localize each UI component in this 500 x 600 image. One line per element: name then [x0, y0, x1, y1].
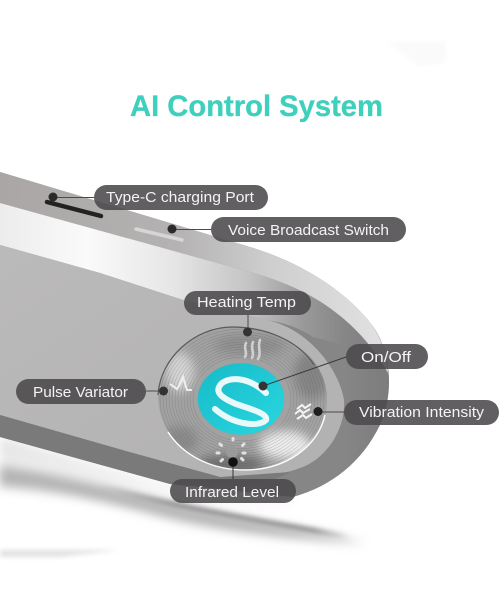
callout: vibration intensity — [314, 400, 499, 425]
top rim strip — [0, 172, 388, 373]
callout: type-c port: Type-C charging Port — [106, 189, 255, 206]
callout: voice switch — [168, 217, 406, 242]
callout: heating temp — [184, 291, 311, 336]
concentric rings — [160, 329, 324, 469]
voice switch — [136, 229, 182, 240]
dial lighting — [162, 335, 330, 475]
dial rim shadow — [158, 327, 314, 395]
callout: infrared level: Infrared Level — [185, 484, 279, 501]
icon: vibration — [295, 404, 312, 419]
callout: infrared level — [170, 457, 296, 503]
control dial — [158, 327, 330, 475]
infographic canvas — [0, 94, 499, 558]
icon: infrared sun — [217, 438, 245, 461]
S logo — [215, 379, 266, 424]
outer shell — [0, 172, 389, 497]
icon: pulse wave — [170, 377, 192, 390]
callout: on/off — [258, 344, 428, 390]
neck device body — [0, 172, 389, 497]
callout: vibration intensity: Vibration Intensity — [359, 404, 485, 421]
callout: type-c port — [48, 185, 268, 210]
callout: heating temp: Heating Temp — [197, 294, 296, 311]
floor shadow — [0, 437, 365, 557]
callout: pulse variator: Pulse Variator — [33, 384, 128, 401]
icon: heat waves — [245, 340, 260, 359]
white highlight band — [0, 203, 345, 345]
dial rim highlight — [168, 415, 325, 470]
title: AI Control System — [130, 90, 383, 123]
dark lower edge — [0, 415, 290, 486]
callout: voice switch: Voice Broadcast Switch — [228, 222, 389, 239]
teal power button — [198, 363, 284, 435]
grey front face — [0, 245, 344, 477]
callout: pulse variator — [16, 379, 168, 404]
USB-C port — [47, 202, 101, 216]
callout: on/off: On/Off — [361, 349, 412, 366]
dial base — [158, 327, 327, 470]
faint top right smudge — [387, 42, 446, 66]
